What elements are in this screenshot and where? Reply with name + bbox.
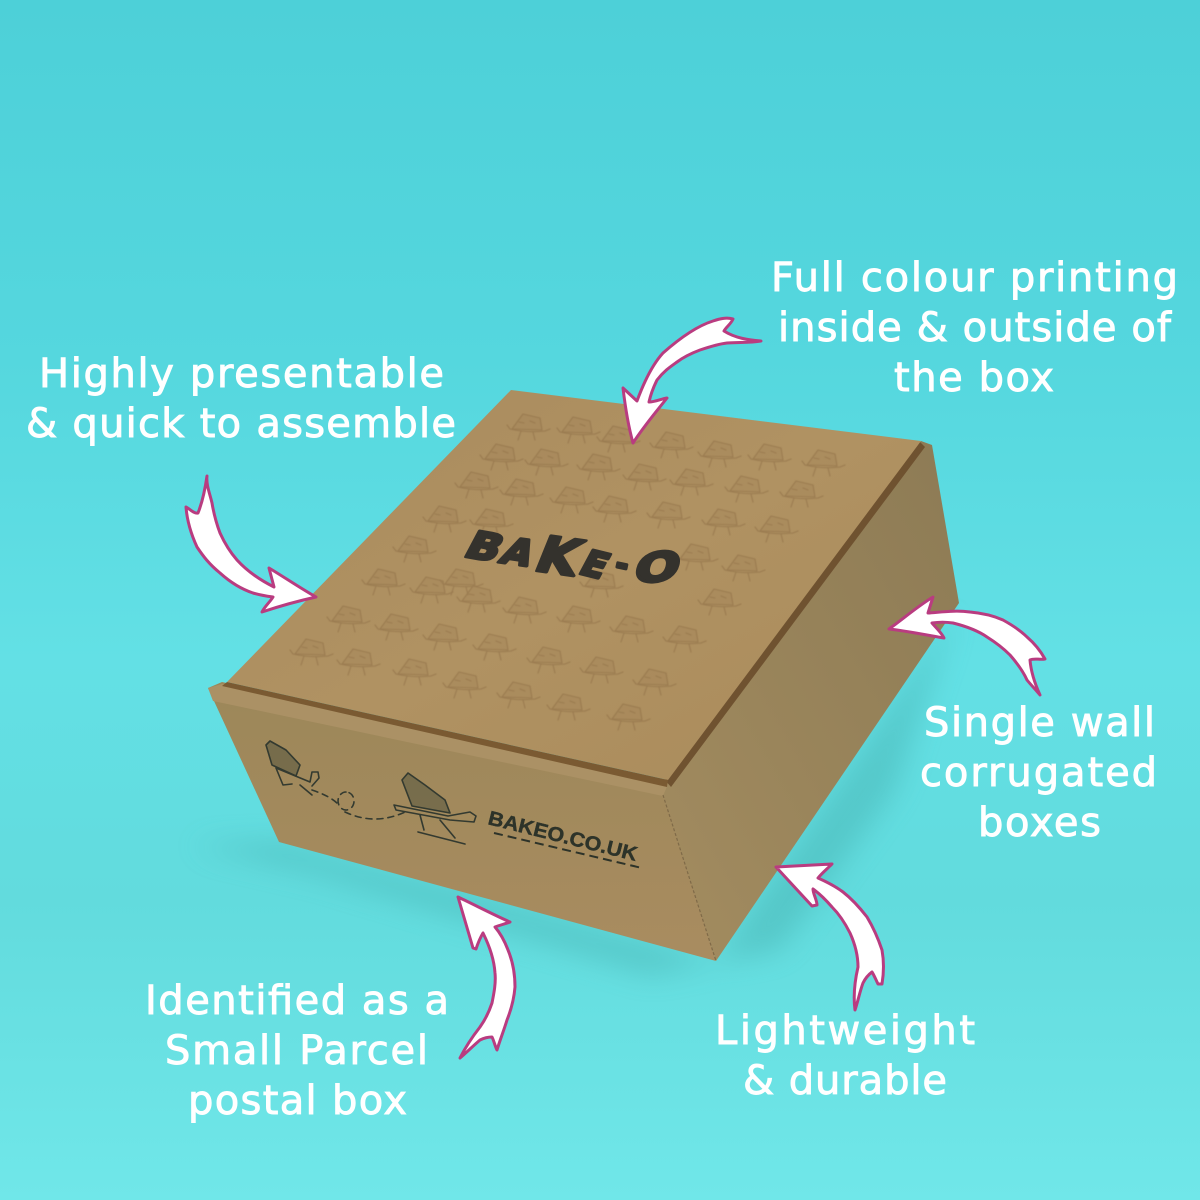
front flap strip	[208, 684, 668, 796]
arrow: bottom left	[458, 897, 515, 1058]
printed character sketches and dashed trail	[266, 741, 476, 844]
website underline	[494, 833, 642, 868]
callout: highly presentable: & quick to assemble	[26, 401, 456, 447]
callout: full colour printing: inside & outside of	[778, 305, 1172, 351]
logo: BAKE-O: A	[494, 531, 543, 574]
website text: BAKEO.CO.UK	[486, 808, 640, 866]
lid top	[227, 390, 921, 780]
arrow: right	[889, 597, 1045, 695]
callout: full colour printing: the box	[894, 355, 1054, 401]
callout: single wall: Single wall	[924, 700, 1155, 746]
character: small cake	[266, 741, 319, 795]
logo: BAKE-O: K	[527, 527, 591, 588]
callout: lightweight: Lightweight	[715, 1008, 975, 1054]
fold seam	[663, 795, 716, 961]
box right side	[660, 441, 959, 961]
logo: BAKE-O: O	[629, 543, 686, 593]
callout: small parcel: Small Parcel	[165, 1028, 428, 1074]
box front side	[208, 682, 716, 961]
lid front lip	[222, 682, 668, 787]
logo: BAKE-O	[458, 523, 686, 593]
arrow: left	[186, 476, 316, 612]
arrow: bottom right	[776, 864, 884, 1010]
lid side edge	[665, 441, 925, 787]
character: large cake on skateboard	[394, 773, 476, 844]
callout: highly presentable: Highly presentable	[39, 351, 444, 397]
logo: BAKE-O: -	[612, 547, 632, 583]
callout: full colour printing: Full colour printing	[771, 255, 1178, 301]
callout: small parcel: postal box	[188, 1078, 407, 1124]
callout: single wall: boxes	[978, 800, 1101, 846]
callout: single wall: corrugated	[920, 750, 1157, 796]
arrow: top	[623, 318, 761, 443]
logo: BAKE-O: E	[573, 543, 617, 587]
callout: lightweight: & durable	[743, 1058, 947, 1104]
printed cake pattern	[290, 414, 845, 730]
box shadow	[190, 610, 955, 975]
logo: BAKE-O: B	[458, 523, 512, 570]
cardboard box	[208, 390, 959, 961]
callout: small parcel: Identified as a	[145, 978, 449, 1024]
dashed trail	[312, 790, 405, 819]
